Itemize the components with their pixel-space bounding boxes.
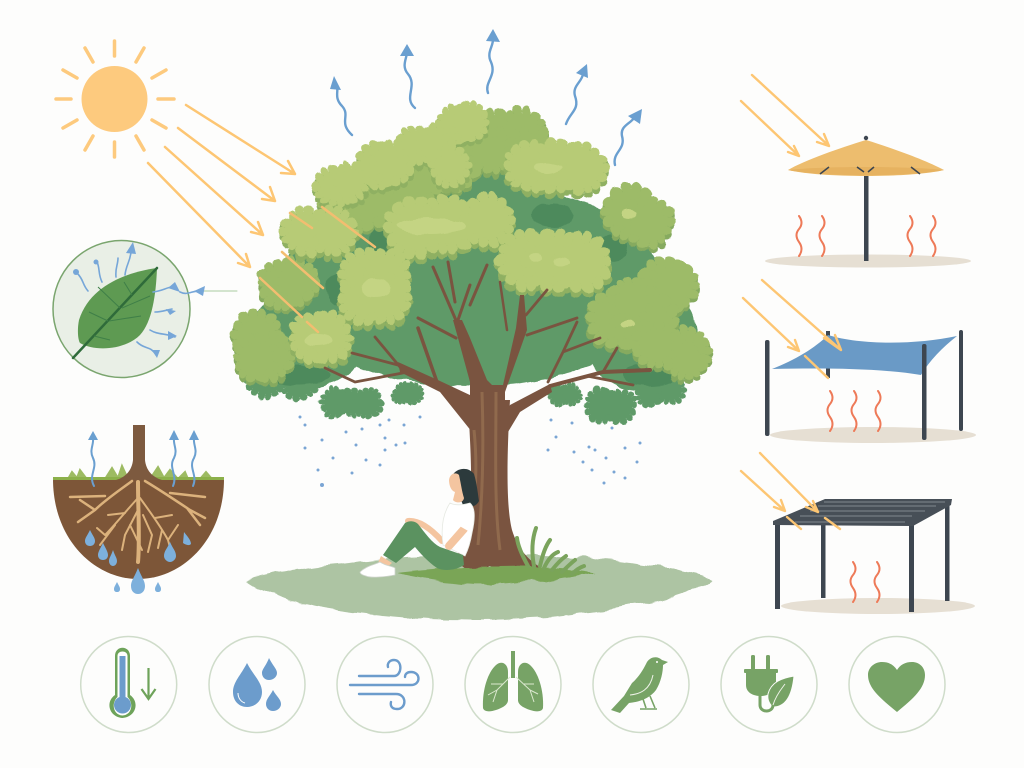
- person sitting against trunk: [360, 469, 479, 577]
- canopy: [788, 140, 944, 176]
- sun arrows: [741, 75, 829, 156]
- heat waves: [796, 216, 936, 256]
- ankles: [378, 556, 392, 568]
- canopy olive clusters: [230, 110, 712, 386]
- stem: [116, 425, 162, 480]
- mist droplets left: [298, 416, 422, 487]
- vapour arrows: [77, 252, 237, 355]
- bright grass around trunk: [398, 567, 595, 584]
- canopy foliage: [230, 101, 712, 425]
- upward water arrows: [91, 438, 196, 486]
- ground shadow: [770, 427, 976, 443]
- icon: plug and leaf: [721, 636, 817, 732]
- leaf magnifier: [53, 240, 237, 378]
- water drops: [85, 530, 191, 594]
- roots: [70, 481, 205, 562]
- slatted roof: [773, 499, 952, 526]
- grass tuft: [517, 528, 584, 574]
- canopy light clusters: [279, 106, 613, 369]
- main limbs: [398, 295, 552, 432]
- icon: wind: [337, 636, 433, 732]
- ground shadow: [781, 598, 975, 614]
- hair: [452, 469, 479, 507]
- icon: water drops: [209, 636, 305, 732]
- pole: [864, 165, 868, 261]
- heat waves: [828, 391, 880, 431]
- canopy dark patches: [266, 203, 676, 385]
- shoes: [360, 562, 395, 577]
- posts: [765, 330, 963, 440]
- grass on soil: [68, 466, 212, 479]
- shirt: [442, 503, 474, 556]
- face and neck: [449, 473, 464, 502]
- arrow heads: [330, 29, 642, 124]
- canopy highlight flecks: [306, 162, 637, 347]
- sun arrows: [741, 453, 840, 529]
- shade sail panel: [743, 280, 976, 443]
- canopy base: [245, 140, 698, 425]
- heat waves: [850, 562, 880, 602]
- tree: [230, 101, 712, 574]
- trunk: [442, 400, 545, 574]
- branches: [325, 262, 650, 386]
- sunlight arrows toward tree: [148, 105, 375, 332]
- upper arm: [449, 529, 464, 546]
- sleeve: [456, 512, 474, 532]
- rear post: [826, 331, 830, 378]
- icon: bird: [593, 636, 689, 732]
- trousers: [383, 521, 464, 570]
- leaf veins: [73, 268, 157, 358]
- pergola panel: [741, 453, 975, 614]
- sun: [56, 41, 174, 157]
- leaf: [78, 268, 157, 348]
- mist droplets right: [546, 418, 642, 484]
- icon: heart: [849, 636, 945, 732]
- icon: thermometer: [81, 636, 177, 732]
- ground shadow under tree: [246, 556, 712, 620]
- soil and roots cross-section: [53, 425, 224, 594]
- ground shadow: [765, 254, 971, 268]
- forearm: [408, 521, 442, 541]
- posts: [775, 503, 950, 612]
- umbrella panel: [741, 75, 971, 268]
- soil: [53, 479, 224, 579]
- rising transpiration arrows: [336, 38, 634, 165]
- sun arrows: [743, 280, 841, 378]
- sail: [772, 335, 957, 375]
- trunk bark highlights: [474, 392, 500, 550]
- icon: lungs: [465, 636, 561, 732]
